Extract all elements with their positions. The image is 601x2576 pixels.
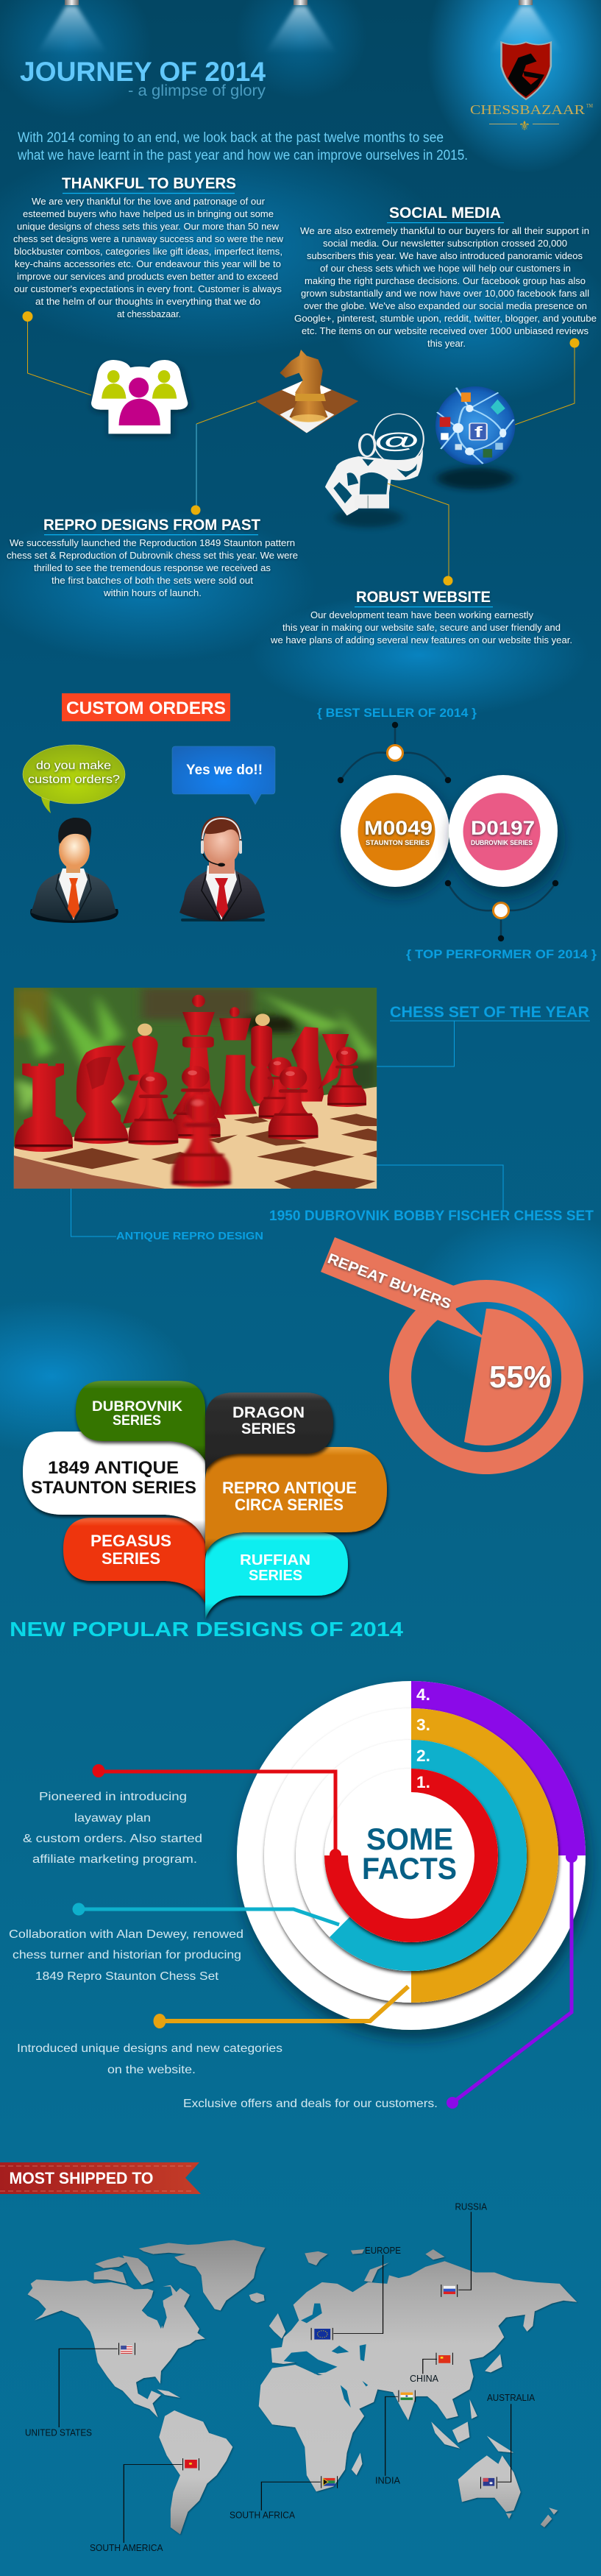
map: flag brackets — [119, 2285, 497, 2488]
spotlights — [37, 0, 563, 53]
text: social media paragraph: this year. — [427, 339, 466, 349]
map labels: SOUTH AMERICA — [90, 2543, 163, 2553]
panel: social media — [294, 205, 597, 349]
speech bubble: question: custom orders? — [28, 774, 120, 786]
ring numbers: 4. — [416, 1685, 430, 1704]
text: website paragraph: Our development team have been working earnestly — [310, 610, 534, 620]
title: - a glimpse of glory — [128, 82, 266, 99]
title: JOURNEY OF 2014 — [20, 57, 266, 87]
panel: repro designs from past — [7, 517, 298, 598]
bubble: dubrovnik series: SERIES — [113, 1413, 161, 1429]
label: chess set of the year — [377, 1004, 590, 1066]
text: thankful paragraph: We are very thankful for the love and patronage of our — [32, 197, 265, 207]
text: fact 3: on the website. — [107, 2064, 196, 2076]
icon: social media globe — [435, 386, 515, 489]
text: social media paragraph: of our chess sets which we hope will help our customers in — [320, 263, 571, 274]
connector: social media to globe — [515, 339, 580, 425]
text: social media paragraph: We are also extremely thankful to our buyers for all their support in — [300, 226, 589, 236]
connector: best seller node — [338, 722, 451, 783]
text: social media paragraph: over the globe. We've also expanded our social media presence on — [304, 301, 587, 311]
text: fact 1: Pioneered in introducing — [39, 1791, 187, 1803]
text: thankful paragraph: at chessbazaar. — [117, 309, 181, 319]
text: social media paragraph: making the right purchase decisions. Our facebook group has also — [305, 276, 586, 286]
map labels — [25, 2202, 536, 2553]
label: antique repro design — [71, 1189, 263, 1242]
text: social media paragraph: etc. The items on our website received over 1000 unbiased reviews — [302, 326, 588, 336]
heading: custom orders — [62, 693, 230, 721]
panel: robust website — [270, 589, 572, 645]
text: thankful paragraph: blockbuster combos, categories like gift ideas, imperfect items, — [14, 247, 282, 257]
ribbon heading: most shipped to — [0, 2162, 201, 2194]
photo: red chess set on board — [14, 988, 377, 1189]
text: fact 4: Exclusive offers and deals for our customers. — [183, 2098, 438, 2110]
intro text: With 2014 coming to an end, we look back at the past twelve months to see — [18, 130, 444, 146]
bubble: dragon series: DRAGON — [232, 1404, 305, 1421]
ribbon heading: most shipped to: MOST SHIPPED TO — [9, 2169, 153, 2187]
bubble chart: popular designs — [23, 1381, 387, 1619]
text: fact 3: Introduced unique designs and new categories — [17, 2042, 282, 2055]
map labels: INDIA — [375, 2476, 401, 2486]
bubble: pegasus series — [63, 1518, 205, 1603]
label: 1950 dubrovnik bobby fischer chess set: 1950 DUBROVNIK BOBBY FISCHER CHESS SET — [269, 1209, 594, 1224]
intro text — [17, 130, 468, 163]
icon: support agent — [179, 816, 265, 921]
label: 1950 dubrovnik bobby fischer chess set — [269, 1165, 594, 1224]
badge: M0049: M0049 — [364, 817, 433, 839]
bubble: dubrovnik series — [76, 1381, 205, 1461]
badge: D0197 — [449, 775, 558, 887]
text: fact 2: chess turner and historian for producing — [13, 1949, 241, 1961]
ring center label: SOME — [366, 1822, 453, 1856]
bubble: repro antique circa series: REPRO ANTIQUE — [222, 1479, 357, 1497]
map labels: CHINA — [410, 2374, 439, 2384]
icon: chess knight on board — [256, 350, 358, 433]
ring center label — [362, 1822, 457, 1886]
text: repro paragraph: chess set & Reproduction of Dubrovnik chess set this year. We were — [7, 551, 298, 561]
bubble: pegasus series: SERIES — [102, 1549, 160, 1568]
bubble: dragon series: SERIES — [241, 1420, 296, 1437]
map labels: AUSTRALIA — [487, 2393, 536, 2403]
flag: china — [438, 2355, 450, 2363]
icon: customer man — [30, 818, 118, 923]
connector: knight to repro designs — [191, 402, 256, 515]
badge: M0049: STAUNTON SERIES — [366, 839, 430, 847]
text: social media paragraph: subscribers this year. We have also introduced panoramic videos — [307, 251, 583, 261]
text: repro paragraph: We successfully launched the Reproduction 1849 Staunton pattern — [10, 538, 295, 548]
logo: chessbazaar: CHESSBAZAAR — [470, 102, 585, 117]
chart: some facts rings — [237, 1681, 586, 2030]
speech bubble: question — [23, 745, 125, 813]
text: thankful paragraph — [13, 197, 284, 319]
text: repro paragraph: within hours of launch. — [103, 588, 202, 598]
bubble: dubrovnik series: DUBROVNIK — [92, 1399, 182, 1415]
flag: australia — [483, 2478, 494, 2486]
bubble: ruffian series: RUFFIAN — [240, 1552, 310, 1568]
text: thankful paragraph: at the helm of our thoughts in everything that we do — [35, 297, 260, 307]
text: thankful paragraph: esteemed buyers who have helped us in bringing out some — [23, 209, 274, 219]
connector: fact 2 — [72, 1903, 339, 1925]
text: fact 1: layaway plan — [74, 1812, 151, 1825]
text: fact 1: affiliate marketing program. — [32, 1853, 197, 1866]
text: social media paragraph: grown substantially and we now have over 10,000 facebook fans all — [301, 289, 589, 299]
speech bubble: question: do you make — [36, 760, 111, 772]
ring numbers: 3. — [416, 1716, 430, 1734]
ring numbers: 2. — [416, 1747, 430, 1765]
label: top performer: { TOP PERFORMER OF 2014 } — [406, 947, 597, 961]
heading: repro designs: REPRO DESIGNS FROM PAST — [43, 517, 260, 534]
icon: website weightlifter — [325, 414, 424, 528]
text: website paragraph: we have plans of adding several new features on our website this year. — [270, 635, 572, 645]
flag: united states — [121, 2346, 132, 2354]
text: repro paragraph: the first batches of both the sets were sold out — [51, 576, 254, 586]
bubble: dragon series — [205, 1393, 333, 1472]
text: thankful paragraph: key-chains accessories etc. Our endeavour this year will be to — [15, 259, 281, 269]
bubble: pegasus series: PEGASUS — [90, 1532, 171, 1550]
text: fact 2: 1849 Repro Staunton Chess Set — [35, 1970, 219, 1983]
speech bubble: answer — [172, 746, 275, 804]
bubble: 1849 antique staunton series — [23, 1432, 205, 1542]
text: website paragraph — [270, 610, 572, 645]
ring numbers: 1. — [416, 1773, 430, 1791]
connector: fact 1 — [93, 1764, 341, 1861]
text: fact 3 — [17, 2042, 282, 2076]
heading: social media: SOCIAL MEDIA — [389, 205, 501, 222]
connector: fact 3 — [153, 1986, 408, 2028]
connector: thankful to people icon — [22, 311, 91, 395]
speech bubble: answer: Yes we do!! — [186, 762, 263, 778]
text: repro paragraph: thrilled to see the tremendous response we received as — [34, 563, 271, 573]
map labels: SOUTH AFRICA — [230, 2510, 296, 2521]
flag: russia — [444, 2286, 455, 2294]
chart: repeat buyers 55% — [321, 1237, 583, 1474]
map: inland seas — [143, 2287, 368, 2407]
icon: people group — [91, 360, 188, 434]
bubble: 1849 antique staunton series: STAUNTON SERIES — [31, 1478, 196, 1498]
icon: website weightlifter: @ — [374, 428, 420, 453]
text: social media paragraph — [294, 226, 597, 349]
chart: repeat buyers 55%: 55% — [489, 1359, 551, 1394]
ribbon: repeat buyers — [321, 1237, 486, 1340]
text: fact 2 — [9, 1928, 243, 1983]
bubble: repro antique circa series — [205, 1447, 387, 1554]
logo: chessbazaar: TM — [586, 103, 594, 109]
icon: social media globe: f — [474, 423, 483, 441]
connector: fact 4 — [447, 1851, 577, 2109]
bubble: ruffian series: SERIES — [249, 1568, 302, 1584]
ring center label: FACTS — [362, 1851, 457, 1886]
badge: M0049 — [341, 775, 449, 887]
label: best seller: { BEST SELLER OF 2014 } — [317, 706, 477, 720]
flag: europe — [314, 2329, 330, 2340]
heading: robust website: ROBUST WEBSITE — [356, 589, 491, 606]
text: fact 1: & custom orders. Also started — [23, 1833, 202, 1845]
map labels: UNITED STATES — [25, 2427, 92, 2438]
bubble: repro antique circa series: CIRCA SERIES — [235, 1496, 344, 1514]
flag: india — [401, 2393, 413, 2400]
badge: D0197: D0197 — [471, 817, 535, 839]
logo: chessbazaar: ⚜ — [519, 118, 530, 134]
label: chess set of the year: CHESS SET OF THE YEAR — [390, 1004, 589, 1021]
panel: thankful to buyers — [13, 175, 284, 319]
text: fact 2: Collaboration with Alan Dewey, renowed — [9, 1928, 243, 1941]
label: antique repro design: ANTIQUE REPRO DESIGN — [116, 1231, 263, 1242]
bubble: ruffian series — [205, 1532, 348, 1619]
bubble: 1849 antique staunton series: 1849 ANTIQUE — [48, 1458, 179, 1478]
text: thankful paragraph: our customer's expectations in every front. Customer is always — [14, 284, 282, 294]
logo: chessbazaar — [470, 42, 594, 134]
heading: new popular designs: NEW POPULAR DESIGNS OF 2014 — [10, 1618, 403, 1641]
heading: custom orders: CUSTOM ORDERS — [66, 698, 226, 718]
world map — [28, 2212, 577, 2543]
heading: thankful to buyers: THANKFUL TO BUYERS — [62, 175, 236, 192]
ring numbers — [416, 1685, 430, 1791]
text: thankful paragraph: unique designs of chess sets this year. Our more than 50 new — [17, 222, 280, 232]
connector: website to robust website — [388, 484, 453, 586]
flag: south america — [185, 2460, 197, 2468]
text: social media paragraph: Google+, pinterest, stumble upon, reddit, twitter, blogger, and youtube — [294, 314, 597, 324]
connector: top performer node — [445, 880, 558, 941]
text: repro paragraph — [7, 538, 298, 598]
map labels: RUSSIA — [455, 2202, 488, 2212]
intro text: what we have learnt in the past year and how we can improve ourselves in 2015. — [17, 148, 468, 163]
text: social media paragraph: social media. Our newsletter subscription crossed 20,000 — [323, 238, 567, 249]
flag: south africa — [323, 2478, 335, 2486]
ribbon: repeat buyers: REPEAT BUYERS — [325, 1251, 453, 1312]
map: leader lines — [59, 2212, 511, 2543]
map: land masses — [28, 2240, 577, 2534]
text: thankful paragraph: chess set designs were a runaway success and so were the new — [13, 234, 284, 244]
text: thankful paragraph: improve our services and products even better and to exceed — [17, 272, 278, 282]
text: website paragraph: this year in making our website safe, secure and user friendly and — [282, 623, 561, 633]
badge: D0197: DUBROVNIK SERIES — [471, 839, 533, 847]
map labels: EUROPE — [365, 2246, 401, 2256]
text: fact 1 — [23, 1791, 202, 1866]
